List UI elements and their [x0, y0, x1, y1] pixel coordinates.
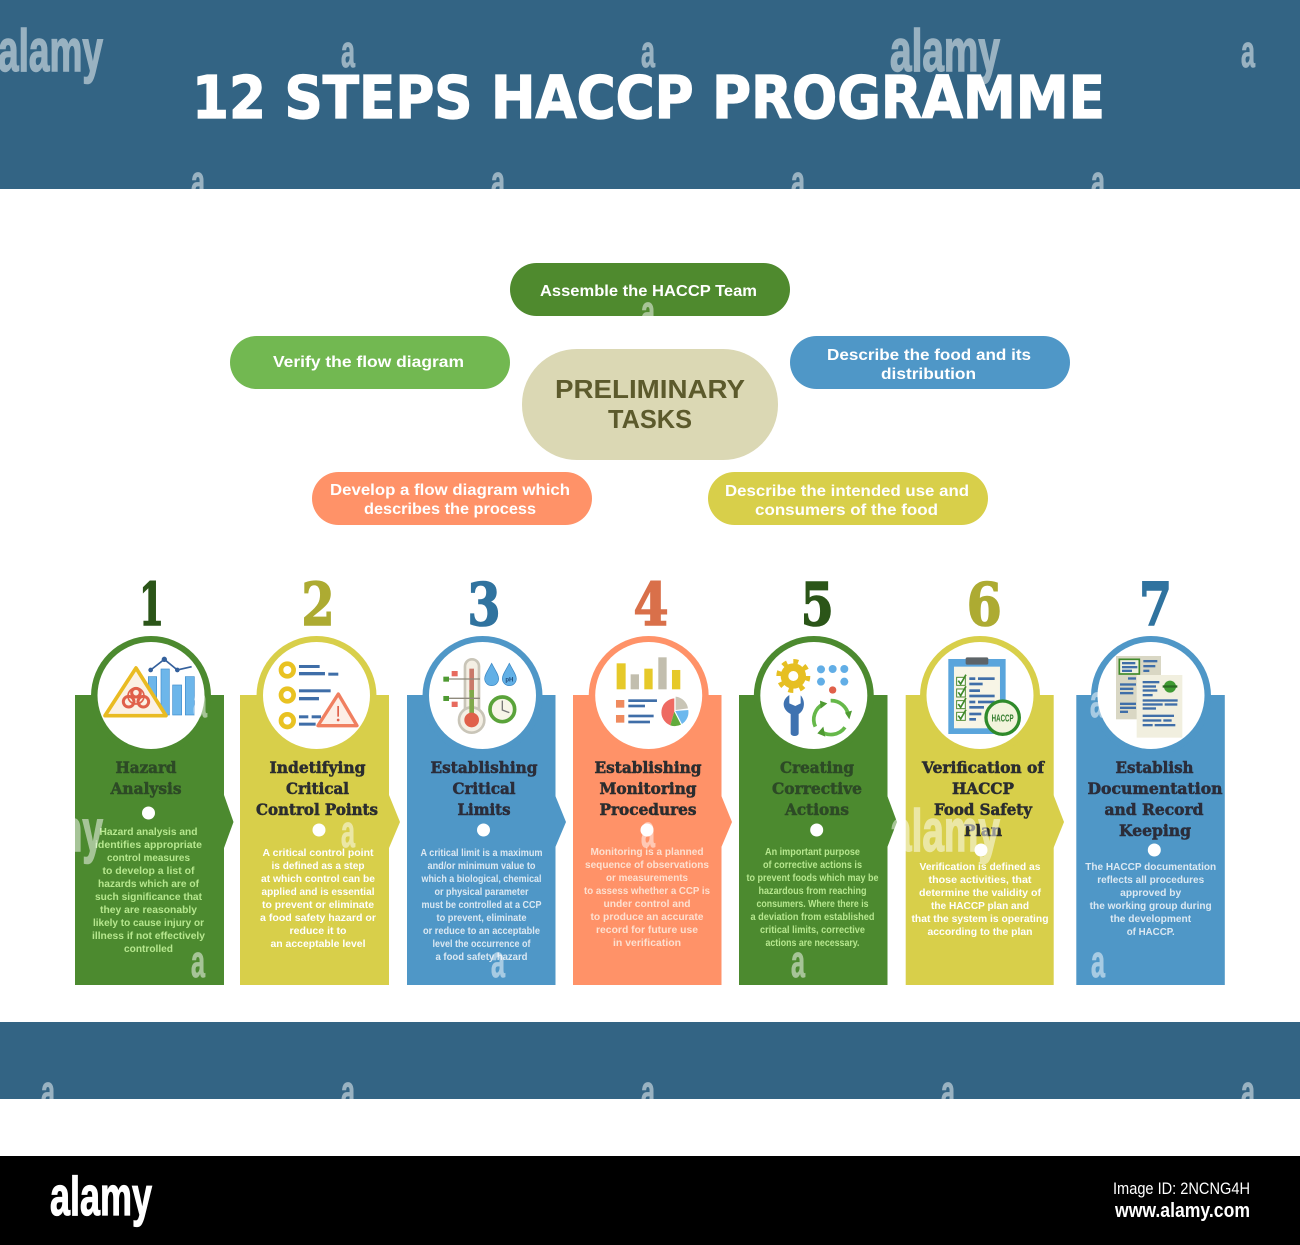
- description: a food safety hazard or: [260, 913, 376, 924]
- description: a food safety hazard: [436, 952, 528, 963]
- heading: [1088, 758, 1223, 840]
- description: which a biological, chemical: [421, 874, 542, 885]
- step 6: verification of HACCP food safety plan: [906, 570, 1064, 985]
- description: to produce an accurate: [590, 912, 704, 923]
- heading: Critical: [452, 779, 516, 798]
- panel: preliminary tasks diagram: [230, 263, 1070, 525]
- number 5: 5: [801, 570, 834, 639]
- stock watermarks: alamy: [890, 798, 1000, 864]
- heading: Verification of: [921, 758, 1045, 777]
- description: approved by: [1120, 888, 1182, 899]
- step 3: establishing critical limits: [407, 570, 566, 985]
- step 7: establish documentation and record keeping: [1076, 570, 1225, 985]
- description: an acceptable level: [270, 939, 366, 950]
- stock watermarks: a: [491, 936, 506, 987]
- stock watermarks: alamy: [0, 18, 103, 84]
- icon: charts and report: [616, 657, 688, 726]
- pill: verify the flow diagram: Verify the flow diagram: [273, 354, 464, 371]
- card shape: [906, 636, 1064, 985]
- description: [420, 848, 543, 963]
- card shape: [240, 636, 400, 985]
- icon: thermometer, drops and clock: [443, 659, 516, 733]
- dot: [974, 844, 988, 856]
- pill: describe the intended use: [708, 472, 988, 525]
- description: identifies appropriate: [95, 840, 202, 851]
- description: An important purpose: [765, 847, 860, 858]
- pill: develop a flow diagram: Develop a flow diagram which: [330, 482, 570, 499]
- description: to prevent, eliminate: [436, 913, 527, 924]
- description: hazards which are of: [98, 879, 200, 890]
- description: determine the validity of: [919, 888, 1042, 899]
- description: controlled: [124, 944, 173, 955]
- heading: Establishing: [594, 758, 702, 777]
- dot: [142, 806, 155, 820]
- heading: and Record: [1104, 800, 1204, 819]
- stock watermarks: a: [191, 156, 206, 207]
- stock watermarks: a: [791, 156, 806, 207]
- stock watermarks: a: [641, 806, 656, 857]
- stock watermarks: a: [41, 1066, 56, 1117]
- pill: assemble the team: [510, 263, 790, 316]
- description: [584, 847, 710, 949]
- description: those activities, that: [928, 875, 1032, 886]
- description: hazardous from reaching: [758, 886, 866, 897]
- description: of corrective actions is: [763, 860, 862, 871]
- heading: Corrective: [772, 779, 862, 798]
- card shape: [573, 636, 732, 985]
- description: to prevent foods which may be: [746, 873, 879, 884]
- card shape: [1076, 636, 1225, 985]
- heading: [110, 758, 182, 798]
- number 4: 4: [634, 570, 668, 639]
- heading: Analysis: [110, 779, 182, 798]
- pill: describe the food: Describe the food and its: [827, 347, 1031, 364]
- bottom band: [0, 1022, 1300, 1099]
- description: likely to cause injury or: [93, 918, 204, 929]
- step 4: establishing monitoring procedures: [573, 570, 732, 985]
- icon: clipboard with HACCP seal: [948, 657, 1019, 734]
- dot: [640, 824, 654, 836]
- icon: documents: [1116, 656, 1182, 738]
- icon: biohazard warning and bar chart: [105, 657, 194, 716]
- stock watermarks: a: [641, 26, 656, 77]
- footer bar with image credit: [0, 1156, 1300, 1245]
- card shape: [407, 636, 566, 985]
- description: or reduce to an acceptable: [423, 926, 540, 937]
- description: A critical control point: [262, 848, 374, 859]
- stock watermarks: a: [791, 936, 806, 987]
- heading: [772, 758, 862, 819]
- pill: describe the intended use: consumers of the food: [755, 502, 938, 519]
- description: Verification is defined as: [920, 862, 1041, 873]
- stock watermarks: a: [1091, 936, 1106, 987]
- dot: [312, 824, 326, 836]
- description: a deviation from established: [750, 912, 874, 923]
- description: the working group during: [1090, 901, 1212, 912]
- card shape: [739, 636, 897, 985]
- description: [912, 862, 1048, 938]
- description: Monitoring is a planned: [590, 847, 704, 858]
- stock watermarks: a: [1090, 676, 1105, 727]
- number 6: 6: [967, 570, 1002, 639]
- description: illness if not effectively: [92, 931, 205, 942]
- heading: Establish: [1116, 758, 1194, 777]
- pill: develop a flow diagram: describes the process: [364, 501, 536, 518]
- stock watermarks: a: [1241, 1066, 1256, 1117]
- description: A critical limit is a maximum: [420, 848, 543, 859]
- centre pill: preliminary tasks: PRELIMINARY: [555, 374, 745, 404]
- pill: describe the food: [790, 336, 1070, 389]
- centre pill: preliminary tasks: [522, 349, 778, 460]
- description: record for future use: [596, 925, 698, 936]
- card shape: [75, 636, 234, 985]
- heading: Keeping: [1119, 821, 1191, 840]
- heading: Creating: [780, 758, 854, 777]
- stock watermarks: a: [191, 936, 206, 987]
- heading: [921, 758, 1045, 840]
- heading: Critical: [286, 779, 349, 798]
- description: according to the plan: [928, 927, 1032, 938]
- description: they are reasonably: [100, 905, 197, 916]
- description: to assess whether a CCP is: [584, 886, 710, 897]
- description: [1085, 862, 1216, 938]
- heading: Control Points: [256, 800, 378, 819]
- description: that the system is operating: [912, 914, 1048, 925]
- pill: describe the food: distribution: [881, 366, 976, 383]
- description: or measurements: [606, 873, 688, 884]
- description: reflects all procedures: [1097, 875, 1205, 886]
- number 3: 3: [468, 570, 500, 639]
- description: the development: [1110, 914, 1192, 925]
- description: the HACCP plan and: [931, 901, 1029, 912]
- dot: [1148, 844, 1161, 856]
- description: at which control can be: [261, 874, 375, 885]
- heading: Procedures: [600, 800, 696, 819]
- stock watermarks: a: [641, 286, 656, 337]
- description: control measures: [107, 853, 190, 864]
- pill: develop a flow diagram: [312, 472, 592, 525]
- description: The HACCP documentation: [1085, 862, 1216, 873]
- heading: Establishing: [430, 758, 538, 777]
- title: 12 STEPS HACCP PROGRAMME: [192, 63, 1105, 132]
- icon: checklist with warning sign: [281, 664, 357, 727]
- description: reduce it to: [290, 926, 346, 937]
- heading: Hazard: [116, 758, 176, 777]
- description: Hazard analysis and: [100, 827, 198, 838]
- heading: Plan: [964, 821, 1002, 840]
- stock watermarks: a: [1241, 26, 1256, 77]
- image id: Image ID: 2NCNG4H: [1113, 1179, 1250, 1198]
- stock watermarks: a: [341, 1066, 356, 1117]
- number 7: 7: [1139, 570, 1172, 639]
- description: and/or minimum value to: [428, 861, 536, 872]
- heading: HACCP: [952, 779, 1014, 798]
- heading: Limits: [458, 800, 510, 819]
- stock watermarks: a: [341, 26, 356, 77]
- number 1: 1: [139, 570, 164, 639]
- heading: Food Safety: [934, 800, 1033, 819]
- heading: Monitoring: [600, 779, 696, 798]
- stock watermarks: alamy: [890, 18, 1000, 84]
- description: such significance that: [95, 892, 203, 903]
- stock watermarks: a: [1091, 156, 1106, 207]
- icon: gear, wrench and recycle arrows: [779, 661, 852, 737]
- heading: Documentation: [1088, 779, 1223, 798]
- heading: [594, 758, 702, 819]
- description: applied and is essential: [262, 887, 375, 898]
- icon: clipboard with HACCP seal: HACCP: [992, 713, 1014, 724]
- stock watermarks: a: [341, 806, 356, 857]
- pill: verify the flow diagram: [230, 336, 510, 389]
- stock watermarks: a: [641, 1066, 656, 1117]
- description: must be controlled at a CCP: [422, 900, 542, 911]
- number 2: 2: [302, 570, 334, 639]
- description: to prevent or eliminate: [262, 900, 374, 911]
- stock watermarks: a: [491, 156, 506, 207]
- heading: [430, 758, 538, 819]
- description: of HACCP.: [1127, 927, 1175, 938]
- description: sequence of observations: [585, 860, 709, 871]
- description: actions are necessary.: [766, 938, 860, 949]
- heading: Actions: [784, 800, 849, 819]
- description: is defined as a step: [272, 861, 364, 872]
- description: to develop a list of: [102, 866, 195, 877]
- heading: Indetifying: [270, 758, 366, 777]
- alamy logo text: alamy: [50, 1165, 152, 1227]
- step 5: creating corrective actions: [739, 570, 897, 985]
- dot: [477, 824, 490, 836]
- step 2: identifying critical control points: [240, 570, 400, 985]
- description: [260, 848, 376, 950]
- dot: [810, 824, 823, 836]
- description: level the occurrence of: [432, 939, 531, 950]
- description: in verification: [613, 938, 681, 949]
- pill: describe the intended use: Describe the intended use and: [725, 483, 969, 500]
- website: www.alamy.com: [1114, 1200, 1250, 1222]
- stock watermarks: a: [941, 1066, 956, 1117]
- pill: assemble the team: Assemble the HACCP Team: [540, 283, 757, 300]
- description: [746, 847, 879, 949]
- description: under control and: [604, 899, 690, 910]
- description: [92, 827, 205, 955]
- stock watermarks: alamy: [0, 798, 103, 864]
- icon: thermometer, drops and clock: pH: [505, 677, 513, 683]
- description: critical limits, corrective: [760, 925, 865, 936]
- description: or physical parameter: [434, 887, 529, 898]
- centre pill: preliminary tasks: TASKS: [608, 404, 692, 434]
- step 1: hazard analysis: [75, 570, 234, 985]
- heading: [256, 758, 378, 819]
- description: consumers. Where there is: [756, 899, 869, 910]
- stock watermarks: a: [193, 676, 208, 727]
- header band with title: [0, 0, 1300, 189]
